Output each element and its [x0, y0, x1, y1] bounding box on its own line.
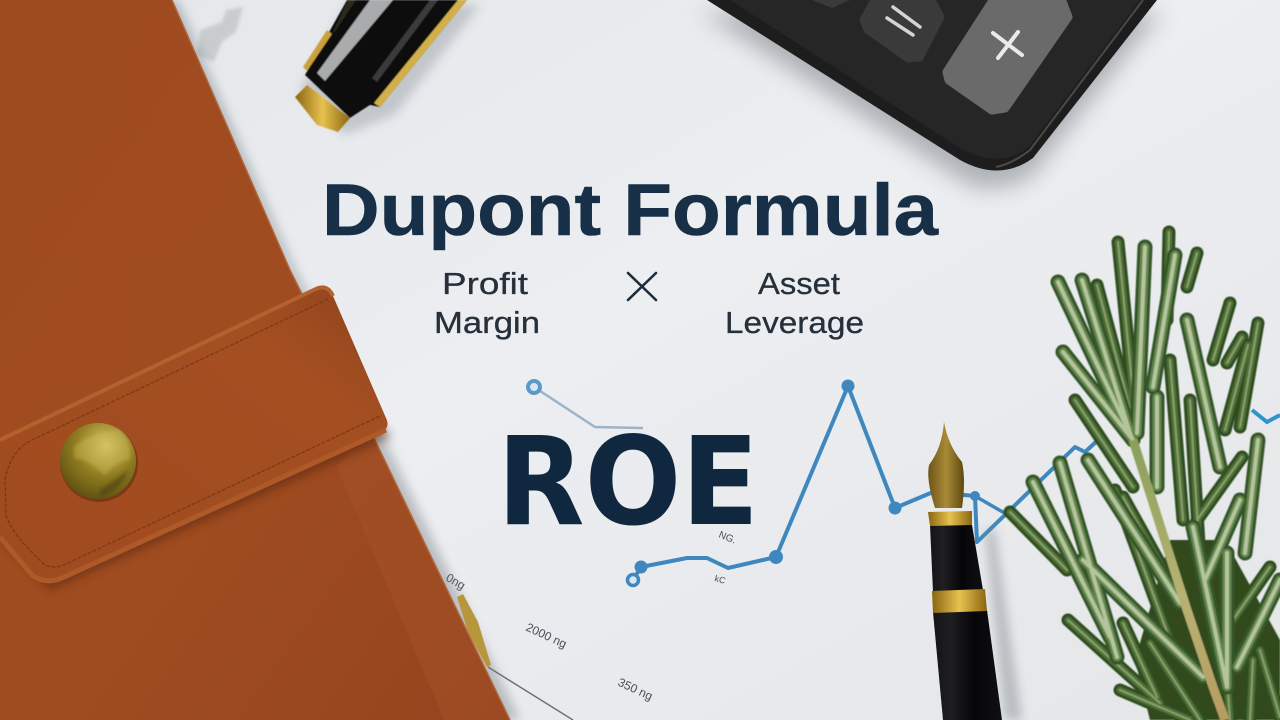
chart axis labels	[444, 530, 737, 703]
label: Asset Leverage: Leverage	[725, 305, 864, 340]
chart axis labels: 2000 ng	[524, 620, 569, 651]
label: Profit Margin: Profit	[442, 266, 528, 301]
calculator plus key	[947, 0, 1068, 110]
rosemary sprig	[1010, 232, 1280, 720]
chart axis labels: kC	[713, 573, 727, 586]
title: Dupont Formula: Dupont Formula	[322, 170, 940, 251]
leather notebook	[0, 0, 520, 720]
fountain pen	[928, 422, 1022, 720]
label: Profit Margin	[434, 266, 540, 340]
label: Profit Margin: Margin	[434, 305, 540, 340]
faded printed graphic on paper	[197, 7, 243, 62]
chart axis labels: NG.	[717, 530, 737, 546]
gold pen cap top	[295, 0, 480, 135]
chart axis labels: 350 ng	[616, 675, 655, 703]
chart: ROE line chart	[444, 380, 1280, 703]
label: Asset Leverage: Asset	[758, 266, 840, 301]
chart axis labels: 0ng	[444, 570, 468, 593]
heading: ROE: ROE	[497, 411, 759, 553]
gold pin on notebook edge	[457, 594, 491, 667]
calculator equals key	[863, 0, 941, 59]
icon: multiply sign	[628, 273, 656, 300]
calculator	[701, 0, 1161, 188]
notebook snap button	[60, 423, 138, 502]
label: Asset Leverage	[725, 266, 864, 340]
notebook strap	[0, 287, 392, 590]
calculator small key	[812, 0, 850, 8]
paper lower edge	[488, 667, 573, 720]
